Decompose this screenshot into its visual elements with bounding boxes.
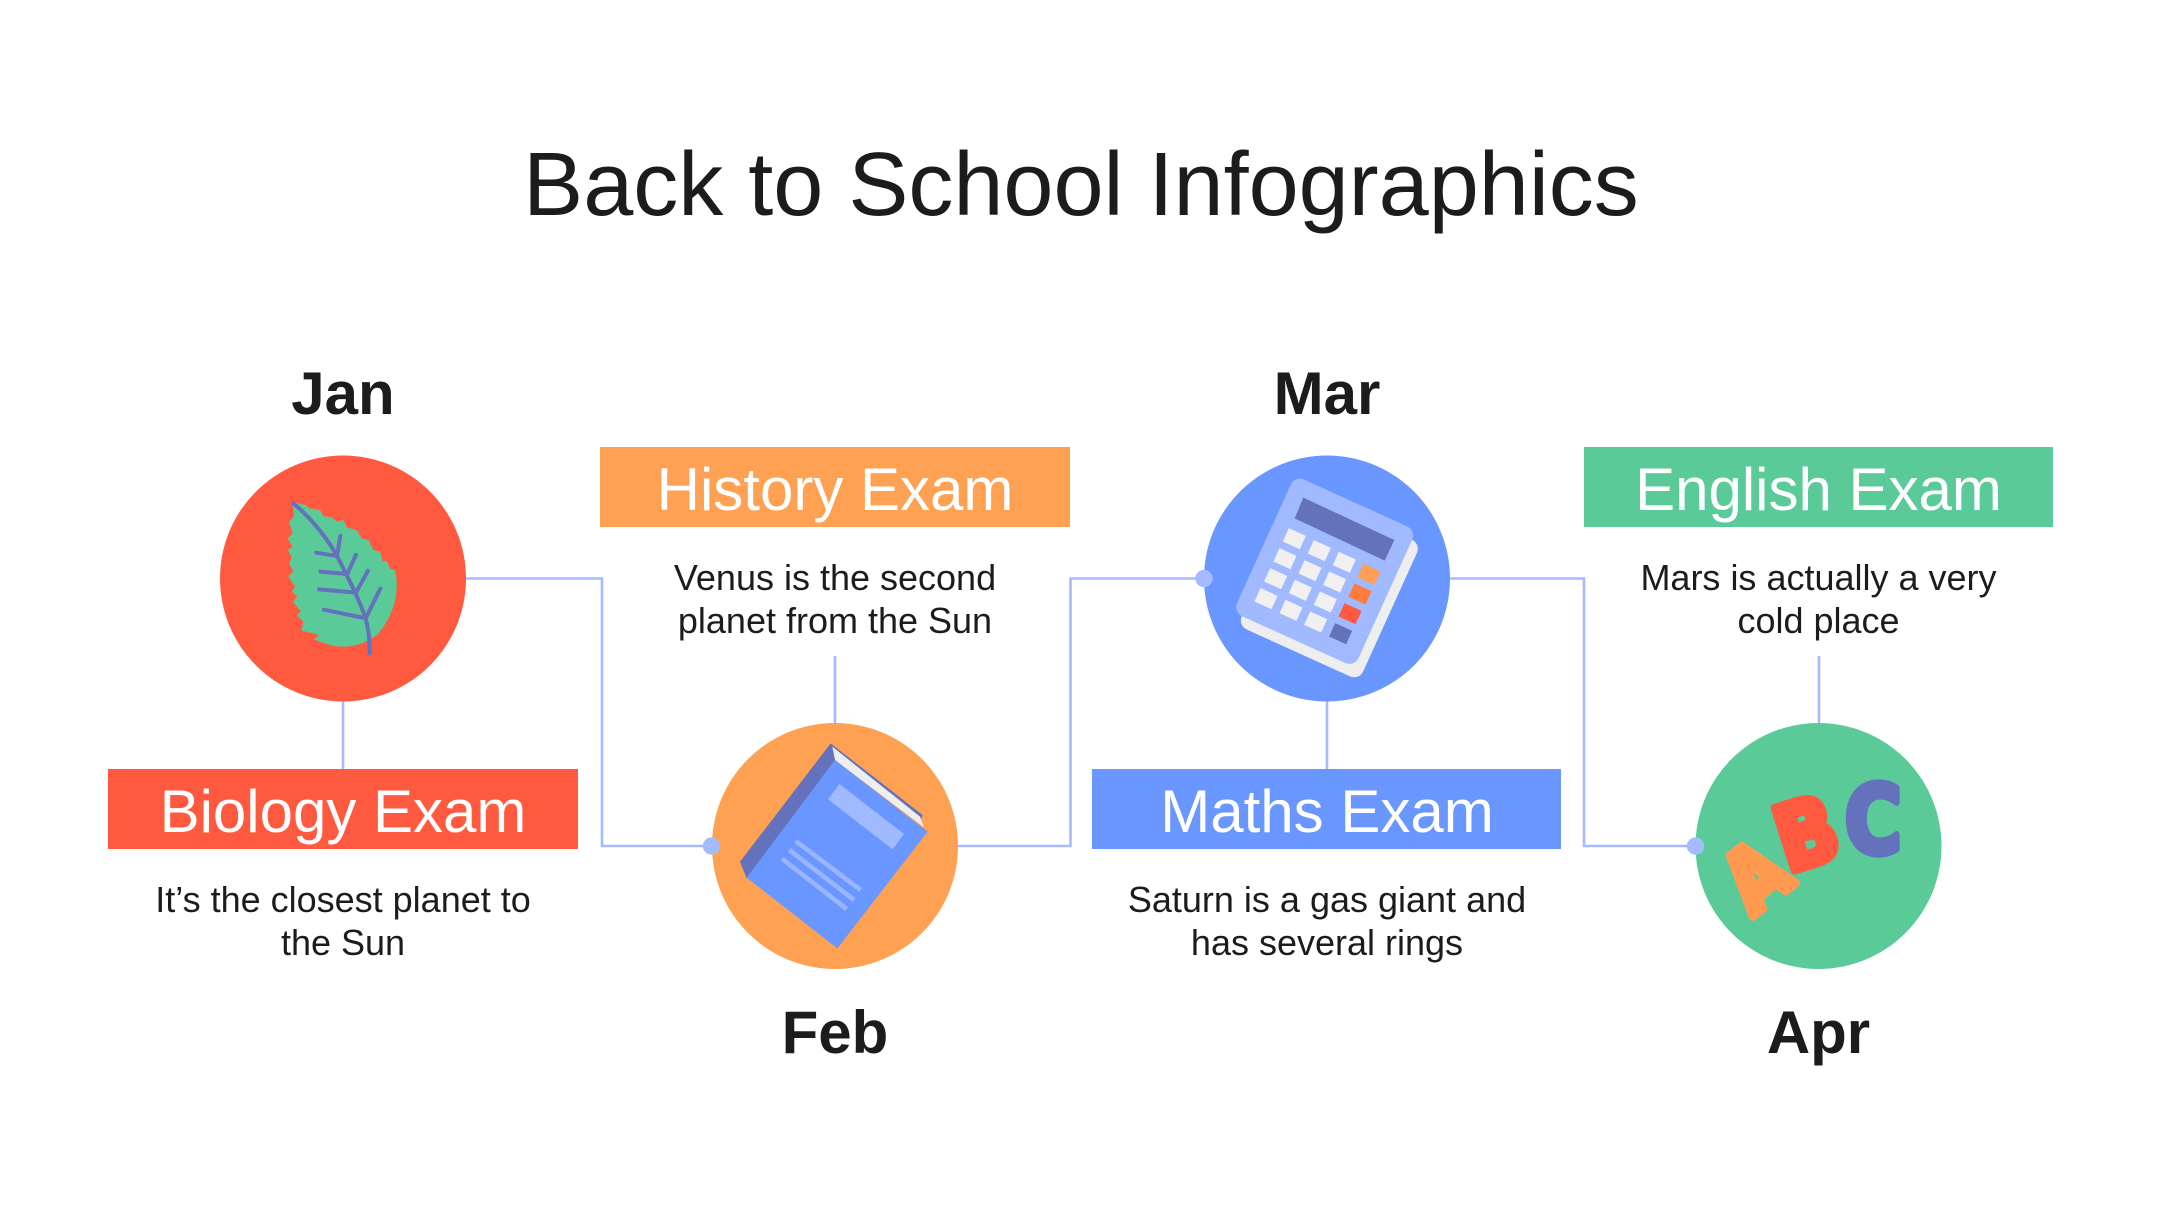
step: Apr english [1584, 447, 2053, 1066]
step: Mar maths: Maths Exam [1160, 778, 1494, 845]
connector dot [1687, 837, 1704, 855]
step: Feb history [600, 447, 1070, 1066]
step: Mar maths [1092, 360, 1561, 963]
circle: Feb [712, 723, 958, 969]
label: Maths Exam [1092, 769, 1561, 849]
title: Back to School Infographics [523, 135, 1639, 235]
icon: ABC letters: B [1762, 775, 1851, 893]
icon: leaf [288, 502, 397, 653]
step: Jan biology: Biology Exam [160, 778, 526, 845]
connector dot [703, 837, 720, 855]
step: Apr english: cold place [1737, 600, 1900, 641]
step: Feb history: History Exam [657, 456, 1013, 523]
step: Feb history: planet from the Sun [678, 600, 992, 641]
month: Mar: Mar [1274, 360, 1380, 427]
month: Feb: Feb [782, 999, 888, 1066]
month: Jan: Jan [291, 360, 395, 427]
connector dot [1195, 570, 1213, 587]
icon: ABC letters [1704, 766, 1902, 933]
description: Biology: It’s the closest planet to [155, 879, 531, 920]
label: Biology Exam [108, 769, 578, 849]
description: History: Venus is the second [674, 557, 996, 598]
step: Mar maths: has several rings [1191, 922, 1463, 963]
step: Jan biology: the Sun [281, 922, 405, 963]
icon: ABC letters: C [1845, 766, 1902, 875]
circle: Apr [1696, 723, 1942, 969]
circle: Jan [220, 456, 466, 702]
step: Apr english: English Exam [1635, 456, 2002, 523]
month: Apr: Apr [1767, 999, 1870, 1066]
label: History Exam [600, 447, 1070, 527]
step: Jan biology [108, 360, 578, 963]
description: Maths: Saturn is a gas giant and [1128, 879, 1526, 920]
circle: Mar [1204, 456, 1450, 702]
icon: book [740, 743, 928, 948]
icon: calculator [1233, 475, 1421, 681]
label: English Exam [1584, 447, 2053, 527]
description: English: Mars is actually a very [1640, 557, 1997, 598]
connector lines [343, 578, 1819, 846]
icon: ABC letters: A [1704, 821, 1809, 933]
